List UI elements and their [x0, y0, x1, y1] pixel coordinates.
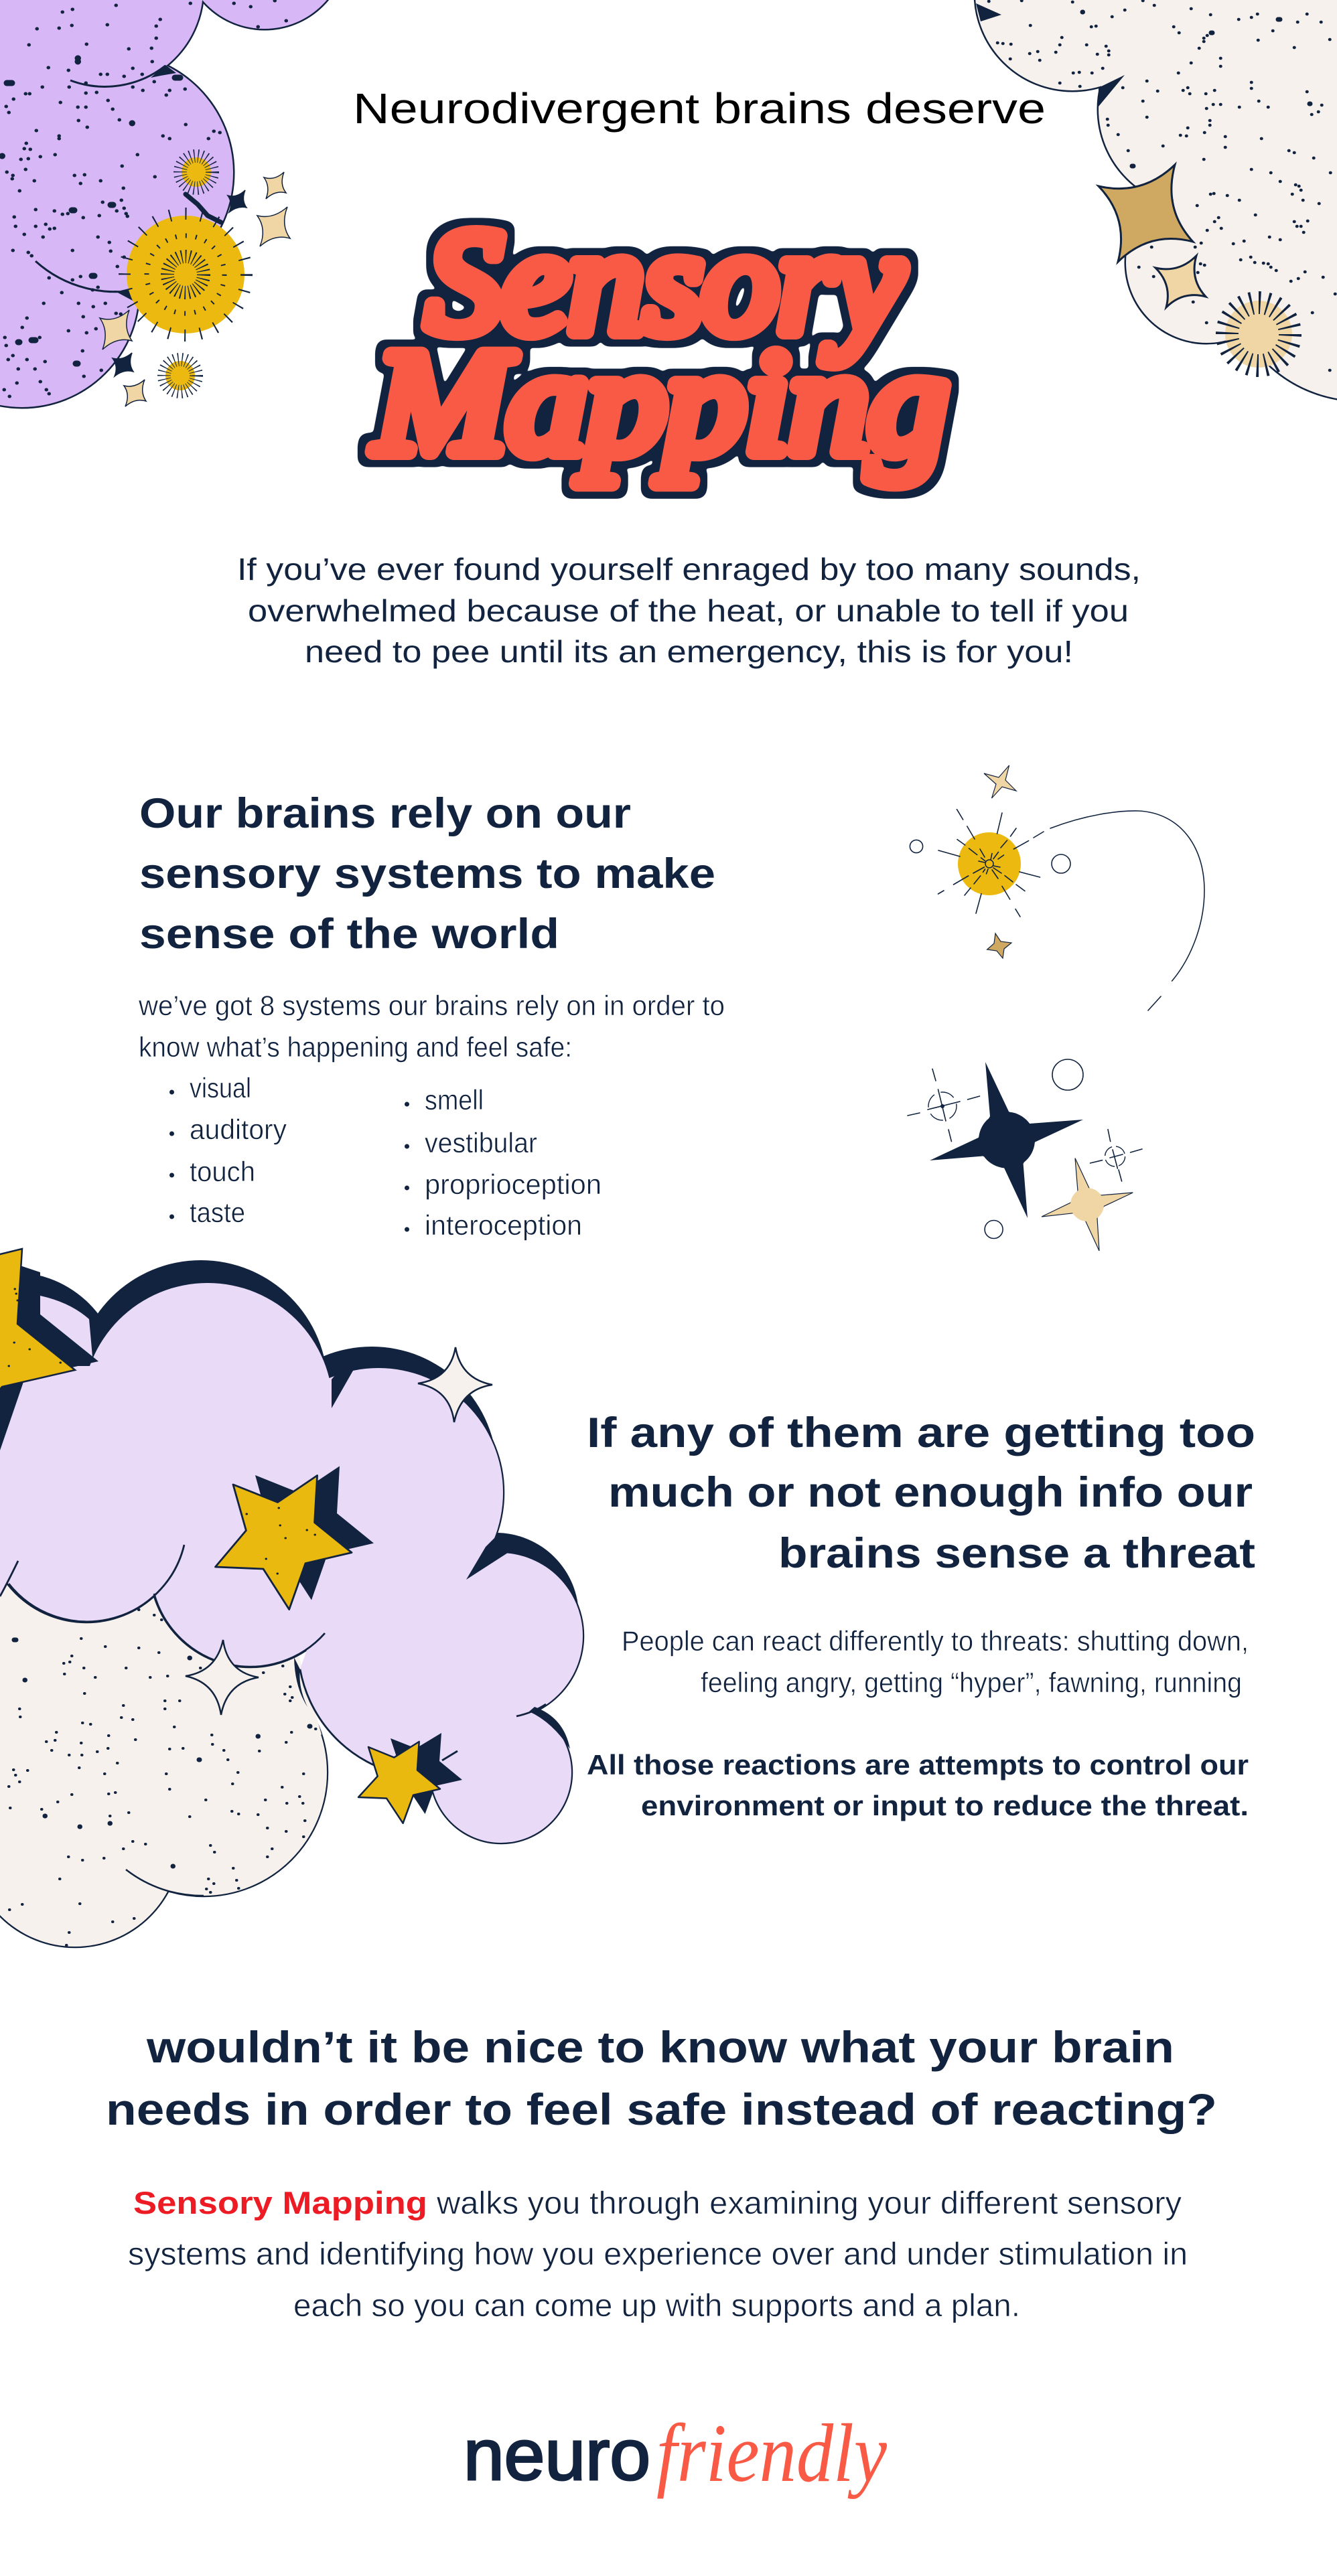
closing paragraph: systems and identifying how you experience over and under stimulation in: [128, 2236, 1188, 2271]
lead paragraph: If you’ve ever found yourself enraged by too many sounds,: [237, 552, 1141, 587]
cloud cluster: top right cream: [975, 0, 1337, 400]
list: senses column one: taste: [190, 1197, 245, 1228]
icon: pale sun right: [1225, 301, 1292, 368]
icon: large yellow sun: [125, 214, 247, 335]
body text: reactions: People can react differently to threats: shutting down,: [622, 1625, 1249, 1657]
logo: neurofriendly: friendly: [656, 2407, 888, 2499]
closing paragraph: walks you through examining your different sensory: [436, 2185, 1182, 2220]
heading: question: wouldn’t it be nice to know what your brain: [146, 2022, 1174, 2072]
lead paragraph: need to pee until its an emergency, this is for you!: [305, 634, 1073, 669]
list: senses column two: vestibular: [425, 1127, 537, 1158]
lead paragraph: [237, 552, 1141, 669]
icon: yellow star centre: [216, 1466, 374, 1610]
closing paragraph: Sensory Mapping: [133, 2185, 427, 2220]
closing paragraph: each so you can come up with supports and a plan.: [293, 2287, 1020, 2323]
bold text: control: All those reactions are attempts to control our: [587, 1749, 1249, 1781]
icon: tan sparkle large: [1099, 165, 1193, 262]
heading: sensory systems: Our brains rely on our: [139, 790, 631, 837]
body text: reactions: [622, 1625, 1249, 1698]
icon: yellow star lower: [358, 1733, 462, 1823]
logo: neurofriendly: neuro: [464, 2414, 650, 2495]
heading: threat: brains sense a threat: [778, 1530, 1255, 1577]
body text: 8 systems: we’ve got 8 systems our brains rely on in order to: [138, 990, 725, 1021]
body text: 8 systems: know what’s happening and feel safe:: [139, 1031, 572, 1063]
intro line: Neurodivergent brains deserve: [353, 84, 1046, 133]
icon: tan sparkle small: [1155, 256, 1206, 307]
list: senses column one: [169, 1072, 287, 1228]
list: senses column one: visual: [190, 1072, 251, 1104]
title: Sensory Mapping: Sensory: [427, 200, 903, 364]
icon: sparkles top left: [100, 172, 290, 406]
heading: question: needs in order to feel safe instead of reacting?: [106, 2085, 1217, 2134]
list: senses column two: proprioception: [425, 1168, 602, 1200]
list: senses column two: interoception: [425, 1209, 582, 1241]
bold text: control: environment or input to reduce the threat.: [641, 1790, 1249, 1821]
lead paragraph: overwhelmed because of the heat, or unable to tell if you: [248, 593, 1129, 628]
icon: navy and tan stars with crosshairs: [908, 1059, 1142, 1251]
heading: threat: If any of them are getting too: [587, 1410, 1255, 1456]
icon: large yellow star at left edge: [0, 1249, 98, 1450]
cloud cluster: top left purple: [0, 0, 346, 407]
body text: reactions: feeling angry, getting “hyper”, fawning, running: [701, 1667, 1242, 1698]
heading: sensory systems: [139, 790, 715, 958]
title: Sensory Mapping: [373, 200, 948, 485]
bold text: control: [587, 1749, 1249, 1821]
list: senses column one: touch: [190, 1156, 255, 1187]
list: senses column two: smell: [425, 1084, 484, 1116]
icon: sparkle on lavender cloud: [418, 1347, 492, 1422]
heading: sensory systems: sensory systems to make: [139, 850, 715, 897]
heading: threat: [587, 1410, 1255, 1577]
heading: question: [106, 2022, 1217, 2134]
icon: sun with orbit: [910, 765, 1204, 1010]
heading: sensory systems: sense of the world: [139, 911, 559, 958]
icon: sparkle on cream cloud: [186, 1640, 259, 1715]
body text: 8 systems: [138, 990, 725, 1063]
closing paragraph: [128, 2185, 1188, 2323]
icon: small sun upper: [180, 156, 212, 188]
cloud cluster: cream speckled lower: [0, 1567, 327, 1947]
title: Sensory Mapping: Mapping: [373, 320, 948, 485]
icon: small sun lower: [164, 360, 196, 392]
cloud cluster: lavender with navy shadow: [0, 1260, 583, 1843]
heading: threat: much or not enough info our: [608, 1469, 1253, 1516]
list: senses column two: [405, 1084, 602, 1241]
list: senses column one: auditory: [190, 1114, 287, 1145]
logo: neurofriendly: [464, 2407, 888, 2499]
